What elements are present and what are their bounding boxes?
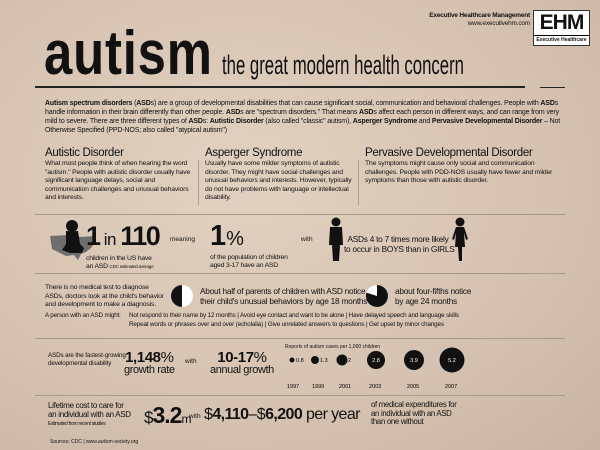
- text: medical expenditures: than one without: [371, 417, 423, 426]
- text: fastest growing: ASDs are the fastest-growing developmental disability: [48, 352, 126, 367]
- intro text: Autism spectrum disorders (ASDs) are a group of developmental disabilities that can cause significant social, communication and behavioral challenges. People with ASDs handle information in their brain differently than other people. ASDs are "spectrum disorders." That means ASDs affect each person in different ways, and can range from very mild to severe. There are three different types of ASDs: Autistic Disorder (also called "classic" autism), Asperger Syndrome and Pervasive Developmental Disorder – Not Otherwise Specified (PPD-NOS; also called "atypical autism"): [45, 100, 560, 134]
- text: four-fifths: about four-fifths notice: [395, 286, 471, 296]
- chart: bubble chart autism reports: [285, 344, 464, 390]
- icon: girl silhouette: [452, 218, 468, 261]
- text: lifetime cost: Lifetime cost to care for: [48, 401, 124, 410]
- chart: bubble chart autism reports: 0.8: [296, 358, 304, 364]
- stat: boys vs girls: to occur in BOYS than in GIRLS: [344, 244, 455, 254]
- stat: 1 in 110: 1 in 110: [86, 221, 159, 251]
- text: meaning: [170, 236, 195, 243]
- title: autism: [44, 19, 213, 88]
- stat: per year: $4,110–$6,200 per year: [204, 406, 360, 423]
- panel: autistic disorder: What most people think of when hearing the word "autism." People with autistic disorder usually have significant language delays, social and communication challenges and unusual behaviors and interests.: [45, 160, 190, 201]
- text: four-fifths: by age 24 months: [395, 296, 457, 306]
- stat: 1 in 110: [86, 221, 160, 270]
- list: a person might: Not respond to their name by 12 months | Avoid eye contact and want to be alone | Have delayed speech and language skills: [129, 312, 459, 319]
- stat: $3.2m: $3.2m: [144, 402, 190, 428]
- text: half of parents: [200, 286, 368, 306]
- stat: 1,148%: [124, 349, 175, 376]
- sources: Sources: CDC | www.autism-society.org: [50, 439, 138, 445]
- chart: bubble chart autism reports: 1.3: [320, 358, 328, 364]
- stat: 10-17%: 10-17%: [217, 349, 267, 366]
- chart: four-fifths pie: [366, 285, 388, 307]
- text: lifetime cost: an individual with an ASD: [48, 410, 131, 418]
- stat: boys vs girls: ASDs 4 to 7 times more likely: [347, 234, 449, 244]
- logo: EHM: Executive Healthcare: [536, 37, 587, 43]
- panel: pervasive developmental disorder: [365, 147, 552, 184]
- stat: 1 in 110: children in the US have: [86, 255, 152, 262]
- chart: bubble chart autism reports: 3.9: [410, 358, 418, 364]
- chart: bubble chart autism reports: 1999: [312, 384, 324, 390]
- stat: 1,148%: 1,148%: [125, 349, 174, 366]
- panel: pervasive developmental disorder: Pervasive Developmental Disorder: [365, 147, 532, 159]
- panel: asperger syndrome: Asperger Syndrome: [205, 147, 302, 159]
- chart: bubble chart autism reports: 1997: [287, 384, 299, 390]
- panel: pervasive developmental disorder: The symptoms might cause only social and communication challenges. People with PDD-NOS usually have fewer and milder symptoms than those with autistic disorder.: [365, 160, 552, 184]
- list: a person might: [45, 312, 459, 328]
- stat: 1%: [210, 220, 288, 268]
- list: a person might: A person with an ASD might:: [45, 312, 121, 319]
- stat: 1%: aged 3-17 have an ASD: [210, 262, 278, 268]
- stat: 10-17%: [210, 349, 274, 376]
- logo: EHM: EHM: [540, 11, 583, 34]
- text: half of parents: their child's unusual behaviors by age 18 months: [200, 296, 367, 306]
- panel: asperger syndrome: Usually have some milder symptoms of autistic disorder. They might have social challenges and unusual behaviors and interests. However, typically do not have problems with language or intellectual disability.: [205, 160, 352, 201]
- chart: bubble chart autism reports: 2: [348, 358, 351, 364]
- header: EHM branding: [429, 10, 590, 46]
- text: medical expenditures: [371, 400, 457, 426]
- chart: bubble chart autism reports: Reports of autism cases per 1,000 children: [285, 344, 380, 350]
- chart: bubble chart autism reports: 2007: [445, 384, 457, 390]
- text: half of parents: About half of parents of children with ASD notice: [200, 286, 365, 296]
- chart: bubble chart autism reports: 5.2: [448, 358, 456, 364]
- chart: bubble chart autism reports: 2001: [339, 384, 351, 390]
- text: lifetime cost: [48, 401, 131, 427]
- stat: 1%: of the population of children: [210, 254, 288, 261]
- text: lifetime cost: Estimated from recent studies: [48, 421, 105, 427]
- stat: 1 in 110: an ASD CDC estimated average: [86, 262, 153, 270]
- stat: boys vs girls: [344, 234, 455, 254]
- icon: boy silhouette: [329, 218, 343, 261]
- text: with: [189, 413, 201, 420]
- list: a person might: Repeat words or phrases over and over (echolalia) | Give unrelated answers to questions | Get upset by minor changes: [129, 321, 444, 328]
- text: no medical test: There is no medical test to diagnose ASDs, doctors look at the child's behavior and development to make a diagnosis.: [45, 284, 164, 308]
- chart: bubble chart autism reports: 2.8: [372, 358, 380, 364]
- text: medical expenditures: of medical expenditures for: [371, 400, 457, 409]
- stat: 1%: 1%: [210, 220, 244, 252]
- chart: bubble chart autism reports: 2003: [369, 384, 381, 390]
- text: four-fifths: [395, 286, 471, 306]
- text: with: [301, 236, 313, 243]
- chart: half pie: [171, 285, 193, 307]
- subtitle: the great modern health concern: [222, 50, 464, 80]
- branding text: Executive Healthcare Management: [429, 12, 530, 19]
- stat: 1,148%: growth rate: [124, 364, 175, 376]
- branding text: www.executivehm.com: [468, 20, 530, 27]
- text: medical expenditures: an individual with an ASD: [371, 408, 452, 418]
- stat: 10-17%: annual growth: [210, 364, 274, 376]
- icon: US map with child: [50, 220, 93, 260]
- logo: EHM: [533, 10, 590, 46]
- title: [44, 19, 464, 88]
- branding text: [429, 12, 530, 27]
- text: with: [185, 358, 197, 365]
- chart: bubble chart autism reports: 2005: [407, 384, 419, 390]
- panel: autistic disorder: Autistic Disorder: [45, 147, 124, 159]
